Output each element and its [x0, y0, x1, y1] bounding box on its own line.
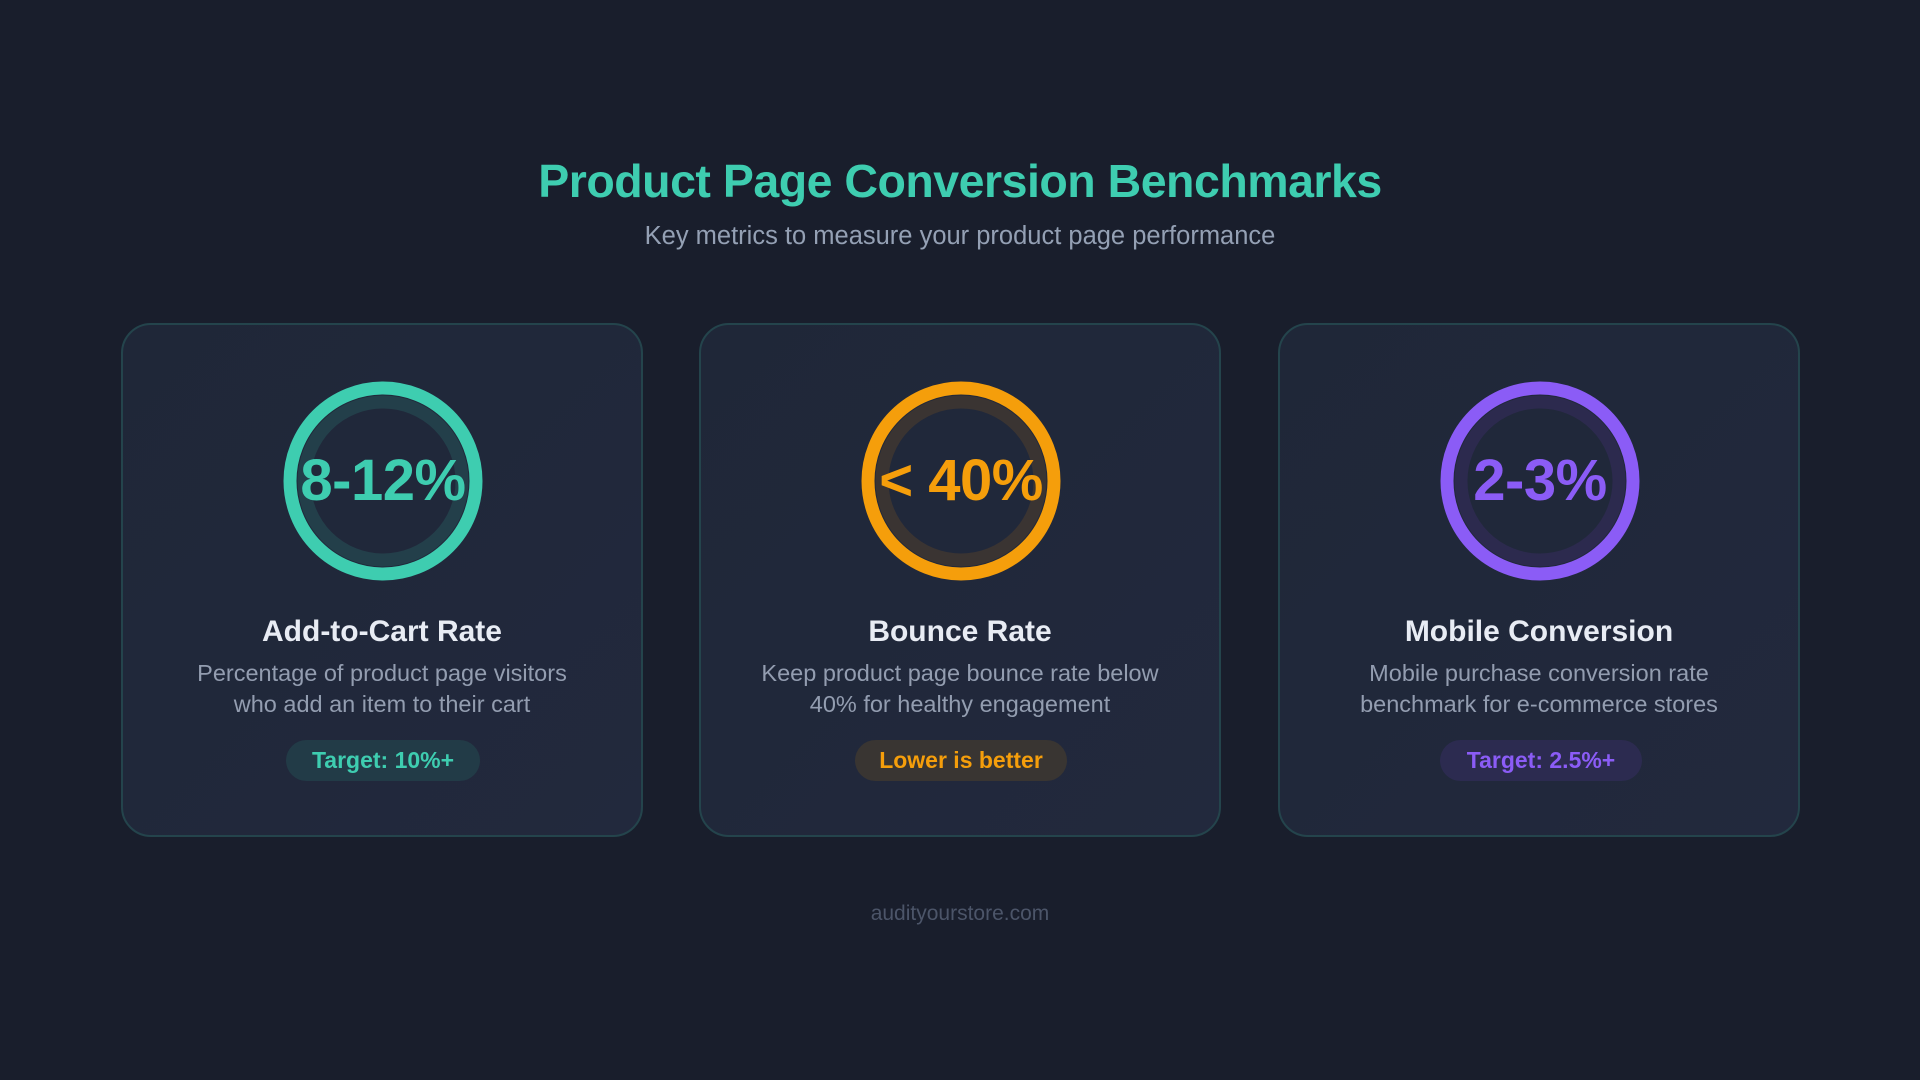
ring chart: <40%: < 40%: [879, 448, 1043, 513]
description: Mobile purchase conversion rate: [1369, 660, 1709, 686]
badge: [286, 740, 480, 781]
description: [761, 660, 1159, 717]
ring chart: 2-3%: [1440, 382, 1640, 580]
heading: Bounce Rate: [868, 615, 1052, 648]
ring chart: 8-12%: 8-12%: [300, 448, 466, 513]
heading: Add-to-Cart Rate: [262, 615, 502, 648]
badge: Target: 2.5%+: [1467, 747, 1615, 773]
heading: Mobile Conversion: [1405, 615, 1673, 648]
badge: Lower is better: [879, 747, 1043, 773]
badge: Target: 10%+: [312, 747, 454, 773]
panel: mobile conversion: [1278, 323, 1800, 837]
badge: [1440, 740, 1642, 781]
description: [1360, 660, 1718, 717]
panel: add-to-cart: [121, 323, 643, 837]
ring chart: 2-3%: 2-3%: [1473, 448, 1607, 513]
description: Percentage of product page visitors: [197, 660, 567, 686]
badge: [855, 740, 1067, 781]
description: [197, 660, 567, 717]
panel: bounce rate: [699, 323, 1221, 837]
description: who add an item to their cart: [234, 691, 530, 717]
description: 40% for healthy engagement: [810, 691, 1110, 717]
description: Keep product page bounce rate below: [761, 660, 1159, 686]
description: benchmark for e-commerce stores: [1360, 691, 1718, 717]
ring chart: <40%: [862, 382, 1060, 580]
subtitle: Key metrics to measure your product page performance: [645, 222, 1275, 250]
footer: audityourstore.com: [871, 902, 1049, 925]
title: Product Page Conversion Benchmarks: [538, 155, 1382, 207]
ring chart: 8-12%: [284, 382, 482, 580]
